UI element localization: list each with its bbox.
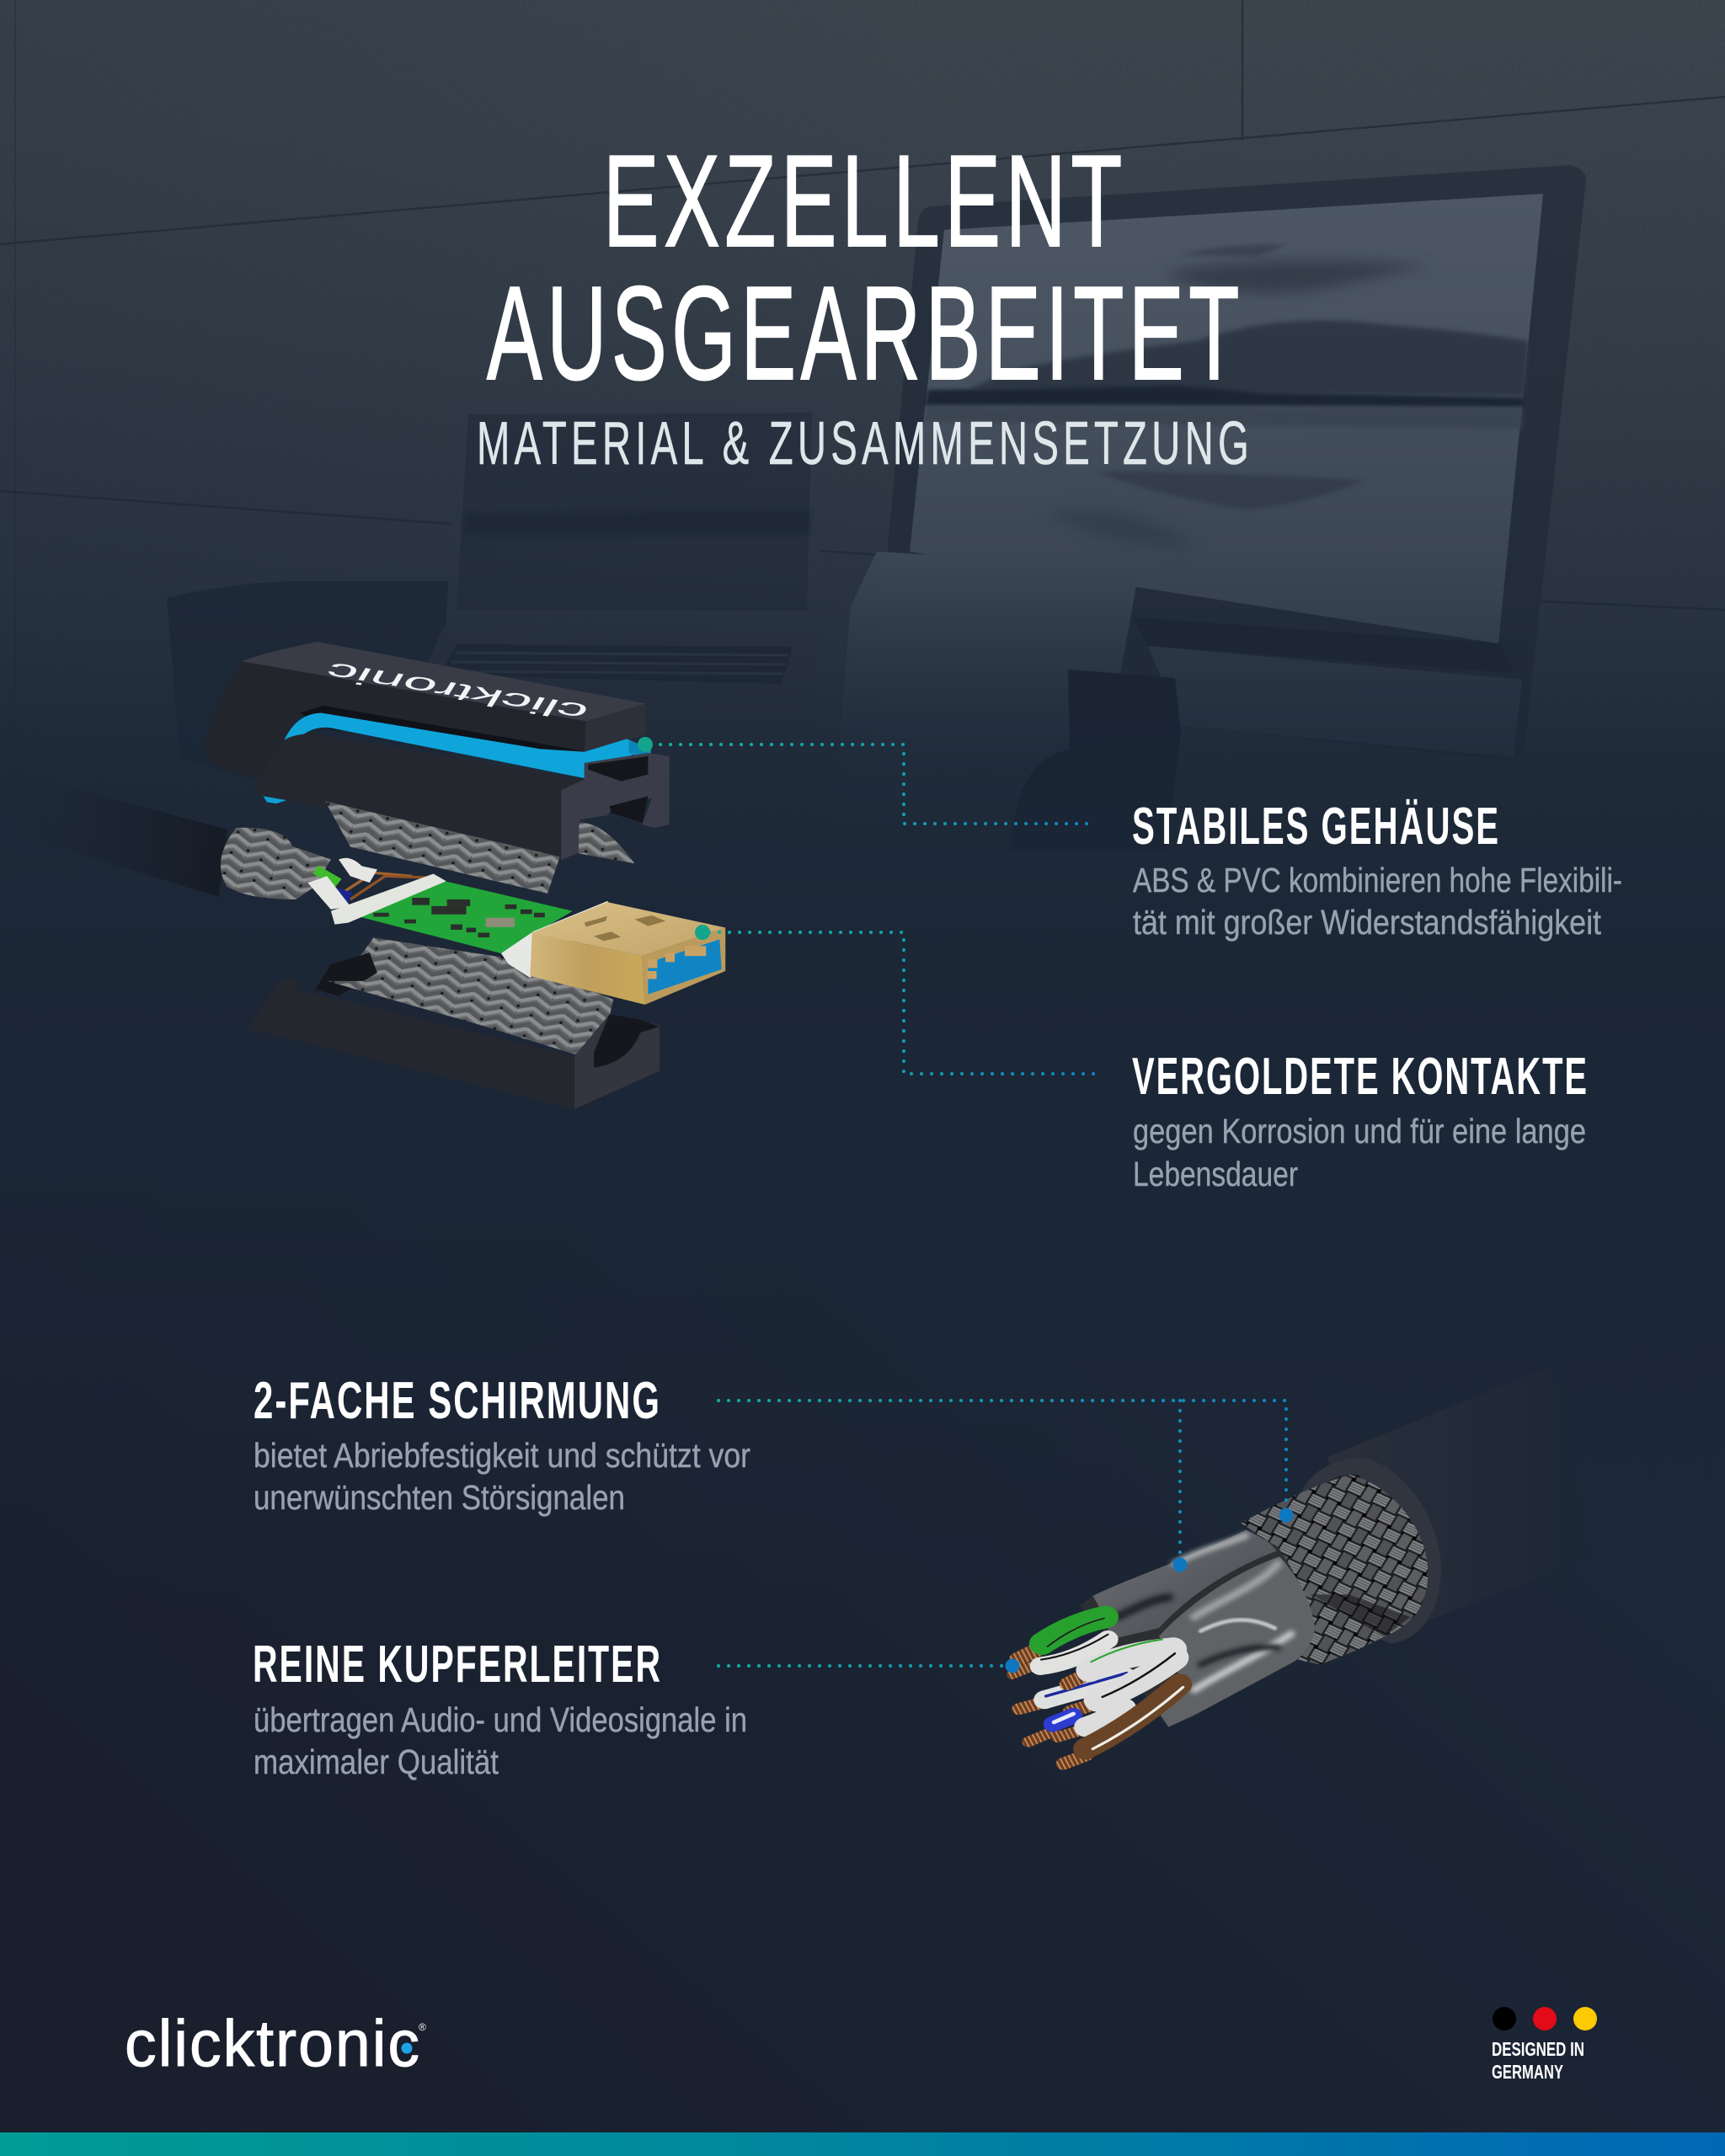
label: shielding: bietet Abriebfestigkeit und schützt vor <box>254 1436 750 1475</box>
upper braid <box>325 801 560 894</box>
dotted leader: copper <box>718 1659 1019 1673</box>
brown wire <box>1063 1684 1183 1764</box>
lower braid front <box>327 981 574 1051</box>
white-green wire <box>1067 1640 1173 1684</box>
label: copper conductors <box>253 1636 747 1781</box>
wires <box>315 869 431 899</box>
lower housing <box>248 979 574 1109</box>
badge text <box>1492 2038 1584 2083</box>
gradient footer bar <box>0 2132 1725 2156</box>
dotted leader: shielding <box>718 1401 1294 1572</box>
label: shielding <box>254 1372 750 1517</box>
green wire <box>1017 1617 1106 1660</box>
title: AUSGEARBEITET <box>487 259 1244 408</box>
foil highlights <box>1117 1535 1291 1690</box>
label: contacts: Lebensdauer <box>1133 1155 1298 1193</box>
laptop <box>423 401 824 724</box>
label: housing: STABILES GEHÄUSE <box>1132 798 1500 856</box>
USB gold shell <box>532 902 725 956</box>
foil base <box>1080 1530 1315 1727</box>
designed in Germany badge <box>1492 2007 1597 2083</box>
label: housing: ABS & PVC kombinieren hohe Flexibili- <box>1133 861 1622 899</box>
cable jacket <box>1327 1364 1588 1642</box>
badge text: GERMANY <box>1492 2061 1563 2083</box>
housing slot <box>300 706 585 751</box>
white connector bar <box>331 874 446 925</box>
upper housing end <box>585 703 646 751</box>
title: EXZELLENT <box>603 128 1127 274</box>
label: contacts: gegen Korrosion und für eine lange <box>1133 1112 1586 1150</box>
upper housing top face <box>242 642 646 721</box>
camera <box>1011 670 1181 851</box>
illustration: shielded cable <box>1012 1364 1588 1764</box>
blue foot <box>264 796 286 803</box>
dotted leader: contacts <box>695 925 1096 1074</box>
lower braid <box>327 937 613 1054</box>
logo dot <box>401 2043 413 2053</box>
jacket end ring <box>1300 1458 1441 1644</box>
subtitle: MATERIAL & ZUSAMMENSETZUNG <box>477 410 1253 478</box>
cable braid ball <box>221 828 331 899</box>
flag dots <box>1493 2007 1597 2031</box>
blue insert <box>284 713 651 778</box>
white wire <box>1057 1708 1125 1737</box>
white-black wire 2 <box>1071 1653 1175 1712</box>
label: copper conductors: maximaler Qualität <box>254 1742 499 1781</box>
foil upper lobe <box>1092 1530 1276 1640</box>
cable behind connector <box>0 768 227 897</box>
label: contacts <box>1132 1048 1589 1193</box>
label: shielding: 2-FACHE SCHIRMUNG <box>254 1372 661 1430</box>
wall panel seams <box>0 0 1725 842</box>
label: shielding: unerwünschten Störsignalen <box>254 1478 625 1517</box>
logo on housing: clicktronic <box>320 657 595 725</box>
label: copper conductors: REINE KUPFERLEITER <box>253 1636 662 1694</box>
PCB components <box>373 898 545 937</box>
wires <box>1012 1617 1183 1764</box>
foil lower lobe <box>1159 1556 1315 1727</box>
PCB <box>350 881 573 953</box>
dotted leader: housing <box>638 737 1096 824</box>
upper housing back <box>205 642 646 787</box>
lower part of upper housing <box>252 734 585 860</box>
label: housing: tät mit großer Widerstandsfähigkeit <box>1133 903 1602 942</box>
printer silhouette <box>167 581 455 842</box>
label: housing <box>1132 798 1622 942</box>
registered mark: ® <box>419 2021 426 2033</box>
white-black wire <box>1012 1635 1108 1674</box>
monitor picture: clouds and horizon <box>925 244 1529 547</box>
blue wire <box>1028 1714 1073 1742</box>
tablet <box>830 552 1138 859</box>
white mould <box>501 901 611 978</box>
white-blue wire <box>1018 1673 1127 1709</box>
badge text: DESIGNED IN <box>1492 2038 1584 2060</box>
brand logo: clicktronic <box>125 2006 421 2080</box>
monitor <box>888 165 1586 760</box>
title <box>487 128 1244 408</box>
illustration: exploded USB connector <box>0 642 725 1109</box>
USB contacts <box>585 915 706 979</box>
outer braid <box>1241 1475 1428 1665</box>
label: copper conductors: übertragen Audio- und Videosignale in <box>254 1700 747 1739</box>
